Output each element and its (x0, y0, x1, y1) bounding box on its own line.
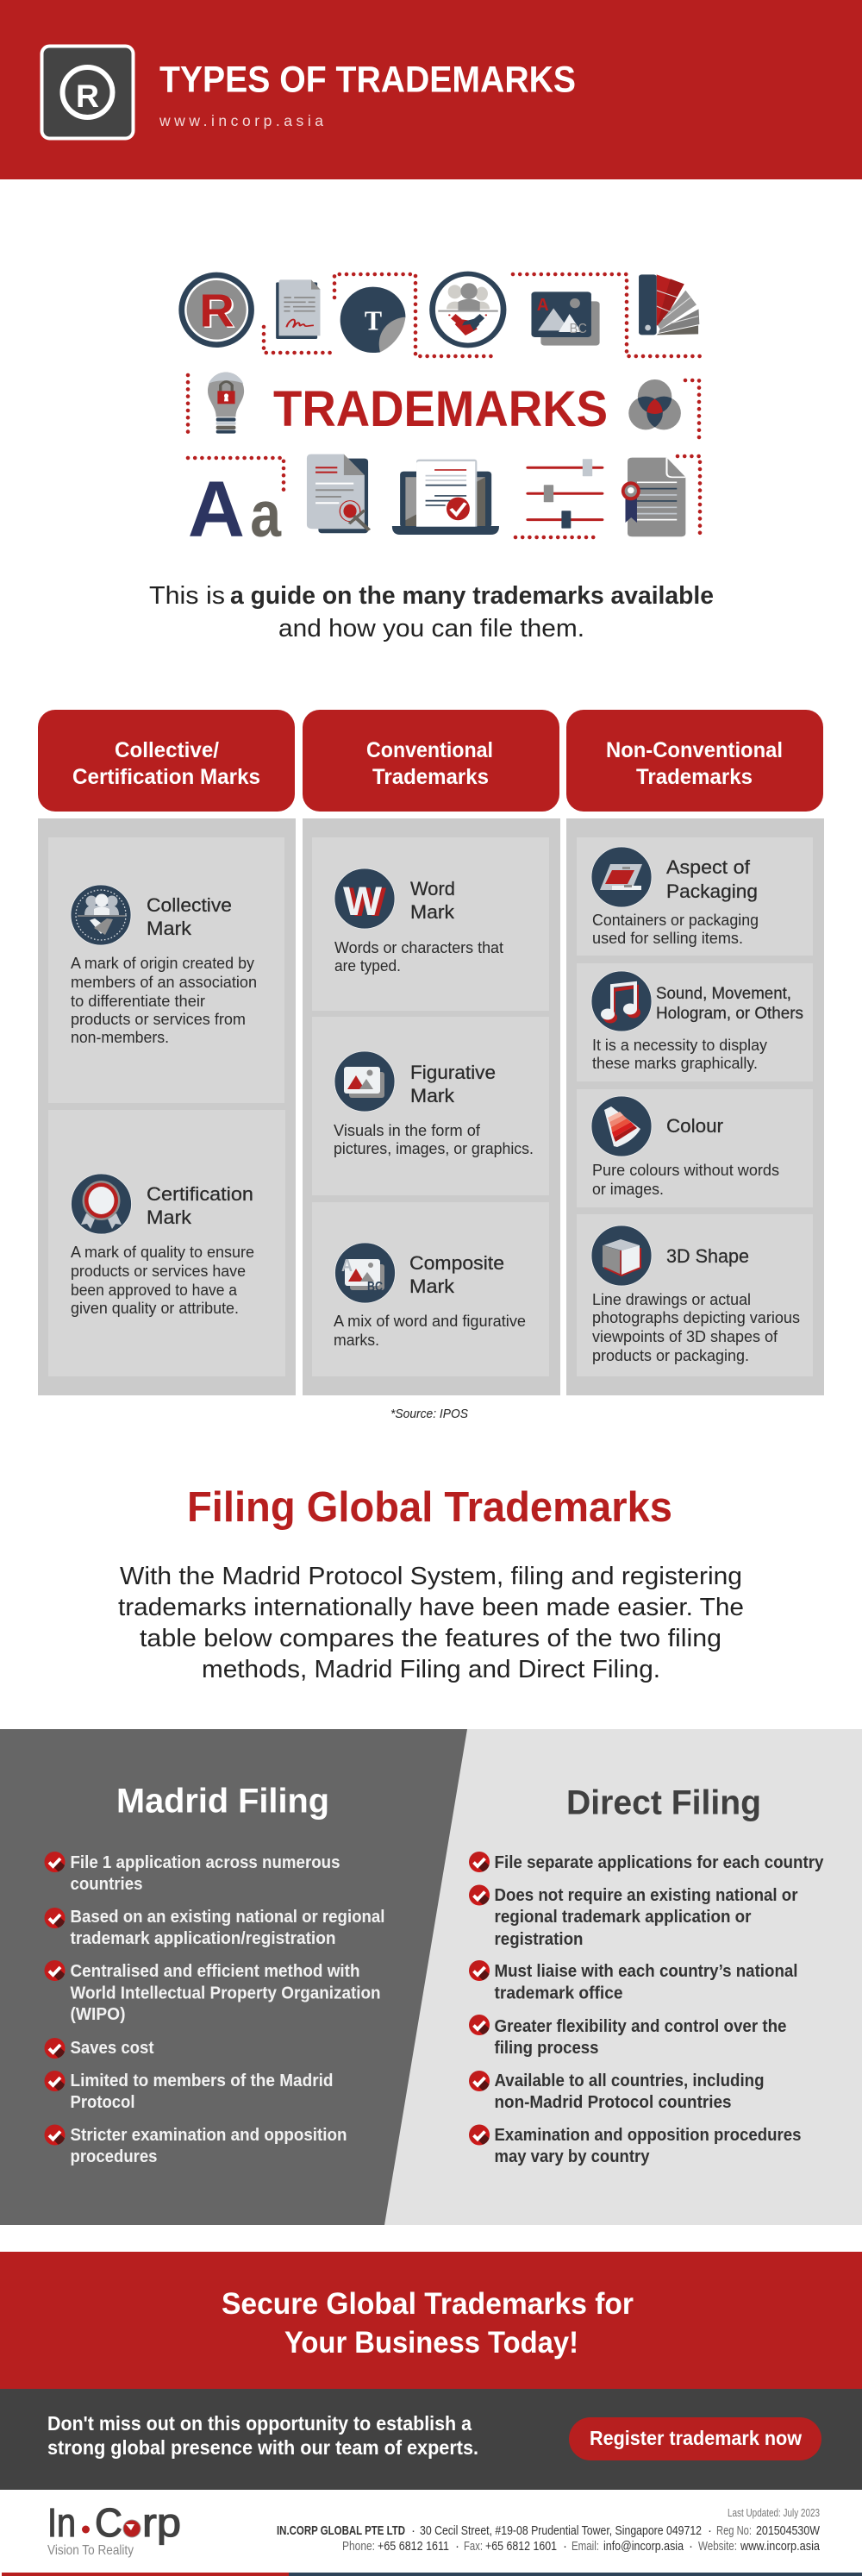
logo: In.Corp: rp (142, 2500, 181, 2545)
footer company details: · (708, 2523, 712, 2538)
source note: *Source: IPOS (390, 1407, 468, 1421)
check list: World Intellectual Property Organization (71, 1984, 381, 2003)
card title: Mark (410, 1085, 455, 1106)
icon: composite mark: BC (367, 1280, 383, 1294)
check list: trademark office (495, 1984, 622, 2003)
card description: Pure colours without words (592, 1162, 779, 1179)
title: TYPES OF TRADEMARKS (159, 60, 576, 100)
card description: pictures, images, or graphics. (334, 1140, 534, 1157)
icon: laptop with approved document (392, 460, 499, 535)
header band (0, 0, 862, 179)
footer company details: info@incorp.asia (603, 2539, 684, 2554)
icon: packaging (591, 847, 652, 907)
column: conventional trademarks (303, 710, 560, 1395)
card description: been approved to have a (71, 1282, 238, 1299)
panel: Direct filing (469, 1783, 824, 2166)
card: composite mark (312, 1202, 549, 1376)
column header: Trademarks (636, 765, 753, 789)
column header: Collective/ (115, 738, 219, 762)
check list: Protocol (71, 2093, 134, 2112)
footer company details: Phone: (342, 2539, 375, 2554)
card title: Collective (147, 894, 232, 916)
check list: Based on an existing national or regional (71, 1908, 384, 1927)
card description: A mark of quality to ensure (71, 1244, 254, 1261)
check list (469, 1852, 824, 2166)
check list: regional trademark application or (495, 1908, 752, 1927)
logo: In.Corp (47, 2500, 181, 2558)
card title: Mark (147, 1207, 192, 1228)
card title: Aspect of (666, 856, 751, 878)
icon: T sticker: T (365, 305, 382, 335)
panel: Madrid filing (45, 1782, 384, 2166)
card: 3D shape (577, 1214, 813, 1376)
intro text (149, 582, 714, 642)
check list: filing process (495, 2039, 598, 2058)
card: word mark (312, 837, 549, 1011)
comparison background (0, 1729, 862, 2225)
footer company details: +65 6812 1611 (378, 2539, 449, 2554)
footer company details: · (689, 2539, 693, 2554)
check list: Examination and opposition procedures (495, 2126, 802, 2145)
card description: to differentiate their (71, 993, 205, 1010)
check list: (WIPO) (71, 2005, 126, 2024)
card title: Certification (147, 1183, 253, 1205)
check list: File 1 application across numerous (71, 1853, 340, 1872)
icon: word mark: W (347, 879, 387, 924)
footer company details: IN.CORP GLOBAL PTE LTD (277, 2523, 405, 2538)
icon: signed document (276, 279, 321, 339)
icon: composite mark (334, 1243, 395, 1303)
card title (410, 1062, 496, 1106)
check list: non-Madrid Protocol countries (495, 2093, 731, 2112)
card title: Mark (409, 1275, 455, 1297)
footer company details: Last Updated: July 2023 (728, 2506, 820, 2519)
card description: A mix of word and figurative (334, 1313, 526, 1330)
card description: Words or characters that (334, 939, 503, 956)
panel heading: Madrid Filing (116, 1782, 329, 1820)
icon: word mark (334, 868, 395, 929)
check list (45, 1852, 384, 2166)
icon: word mark: W (343, 878, 383, 924)
card: aspect of packaging (577, 837, 813, 956)
card title (409, 1252, 504, 1297)
call to action banner (0, 2252, 862, 2389)
check list: countries (71, 1875, 143, 1894)
icon: music notes (591, 971, 652, 1031)
check list: Centralised and efficient method with (71, 1962, 360, 1981)
card title (147, 894, 232, 939)
card: collective mark (48, 837, 284, 1103)
card description (334, 939, 503, 975)
icon: registered R (178, 273, 254, 348)
check list: Available to all countries, including (495, 2071, 764, 2090)
card description: products or packaging. (592, 1347, 749, 1364)
check list: File separate applications for each country (495, 1853, 824, 1872)
card description: marks. (334, 1332, 379, 1349)
icon: collective handshake (429, 272, 506, 348)
card description: given quality or attribute. (71, 1300, 239, 1317)
column header: Conventional (366, 738, 493, 762)
icon: registered mark badge: R (76, 78, 99, 114)
icon: composite picture (531, 291, 600, 346)
card title: Sound, Movement, (656, 984, 791, 1003)
card description (592, 1162, 779, 1198)
filing intro text: With the Madrid Protocol System, filing and registering (120, 1563, 742, 1590)
card description: these marks graphically. (592, 1055, 758, 1072)
card description: or images. (592, 1181, 664, 1198)
card description: A mark of origin created by (71, 955, 254, 972)
card description: Containers or packaging (592, 912, 759, 929)
card: figurative mark (312, 1017, 549, 1195)
intro text: This is (149, 582, 225, 610)
check list: procedures (71, 2147, 157, 2166)
call to action strip (0, 2389, 862, 2490)
card title: Mark (410, 901, 455, 923)
card title: Mark (147, 918, 192, 939)
icon: composite mark: A (341, 1257, 353, 1275)
check list: Does not require an existing national or (495, 1886, 798, 1905)
card description: Line drawings or actual (592, 1291, 751, 1308)
card description: used for selling items. (592, 930, 743, 947)
footer company details: · (563, 2539, 567, 2554)
call to action banner: Secure Global Trademarks for (222, 2287, 634, 2321)
column header: Certification Marks (72, 765, 260, 789)
column header: Non-Conventional (606, 738, 783, 762)
footer company details: · (455, 2539, 459, 2554)
register button (569, 2417, 821, 2460)
register button: Register trademark now (590, 2427, 802, 2449)
card description: members of an association (71, 974, 257, 991)
card title (147, 1183, 253, 1228)
column header (38, 710, 295, 812)
card title: Word (410, 878, 455, 899)
icon: Aa typeface: A (188, 465, 245, 554)
column header: Trademarks (372, 765, 489, 789)
check list: may vary by country (495, 2147, 650, 2166)
card description (71, 955, 257, 1046)
hero illustration (178, 272, 701, 554)
logo: In.Corp: C (95, 2500, 122, 2545)
footer company details: · (411, 2523, 415, 2538)
footer company details: Email: (572, 2539, 599, 2554)
intro text: a guide on the many trademarks available (230, 582, 714, 610)
CTA text: strong global presence with our team of experts. (47, 2436, 478, 2459)
column header (303, 710, 559, 812)
icon: composite picture: A (537, 295, 549, 314)
check list: Stricter examination and opposition (71, 2126, 347, 2145)
icon: registered R: R (199, 285, 234, 337)
check list: trademark application/registration (71, 1929, 336, 1948)
card: certification mark (48, 1110, 285, 1376)
icon: cube (591, 1225, 652, 1286)
icon: registered mark badge (41, 47, 133, 138)
card title: Hologram, or Others (656, 1004, 803, 1023)
card description (592, 912, 759, 947)
dotted connector lines (188, 274, 701, 538)
icon: venn diagram (628, 379, 681, 429)
card title (656, 984, 803, 1023)
check list: Limited to members of the Madrid (71, 2071, 333, 2090)
panel heading: Direct Filing (566, 1783, 761, 1821)
card title: 3D Shape (666, 1245, 749, 1267)
icon: registered R: R (201, 286, 236, 338)
hero word: TRADEMARKS (273, 381, 608, 437)
column: non-conventional trademarks (566, 710, 824, 1395)
card description: viewpoints of 3D shapes of (592, 1328, 778, 1345)
icon: Aa typeface: a (250, 479, 282, 551)
icon: stamped document (307, 454, 369, 533)
icon: certified document (622, 458, 685, 536)
footer company details (277, 2506, 821, 2554)
footer company details: Website: (698, 2539, 737, 2554)
card description: products or services from (71, 1011, 246, 1028)
heading: filing global trademarks: Filing Global Trademarks (187, 1484, 672, 1531)
card: sound, movement, hologram (577, 963, 813, 1081)
logo: In.Corp: In (47, 2500, 76, 2545)
check list: Saves cost (71, 2039, 154, 2058)
filing intro text (118, 1563, 744, 1683)
filing intro text: table below compares the features of the two filing (140, 1625, 721, 1652)
card title: Composite (409, 1252, 504, 1274)
card description: Visuals in the form of (334, 1122, 481, 1139)
bottom colour bar (2, 2573, 862, 2576)
icon: colour fan (639, 274, 699, 335)
icon: certification mark (71, 1174, 131, 1234)
card title: Figurative (410, 1062, 496, 1083)
column header (566, 710, 823, 812)
card description (592, 1291, 800, 1364)
icon: collective mark (71, 885, 131, 945)
call to action banner: Your Business Today! (284, 2326, 578, 2360)
card description: photographs depicting various (592, 1309, 800, 1326)
check list: registration (495, 1930, 583, 1949)
card description: It is a necessity to display (592, 1037, 767, 1054)
CTA text (47, 2412, 478, 2459)
column: collective and certification marks (38, 710, 296, 1395)
filing intro text: trademarks internationally have been made easier. The (118, 1594, 744, 1621)
icon: T sticker (340, 287, 405, 353)
CTA text: Don't miss out on this opportunity to establish a (47, 2412, 472, 2435)
card description: products or services have (71, 1263, 246, 1280)
icon: composite picture: BC (570, 321, 587, 336)
footer company details: 30 Cecil Street, #19-08 Prudential Tower, Singapore 049712 (420, 2523, 702, 2538)
card: colour (577, 1089, 813, 1207)
card description (592, 1037, 767, 1072)
check list: Must liaise with each country’s national (495, 1962, 798, 1981)
icon: figurative mark (334, 1051, 395, 1112)
card description: are typed. (334, 957, 401, 975)
card description: non-members. (71, 1029, 169, 1046)
card title: Packaging (666, 881, 758, 902)
footer company details: 201504530W (756, 2523, 821, 2538)
footer company details: Fax: (464, 2539, 483, 2554)
website: www.incorp.asia (159, 112, 323, 129)
card description (71, 1244, 254, 1317)
icon: IP bulb with lock (208, 373, 244, 434)
icon: colour swatches (591, 1096, 652, 1156)
card description (334, 1313, 526, 1349)
footer company details: Reg No: (716, 2523, 752, 2538)
filing intro text: methods, Madrid Filing and Direct Filing. (202, 1656, 660, 1683)
footer company details: +65 6812 1601 (485, 2539, 557, 2554)
card title: Colour (666, 1115, 723, 1137)
check list: Greater flexibility and control over the (495, 2017, 786, 2036)
logo: In.Corp: Vision To Reality (47, 2543, 134, 2558)
card title (410, 878, 455, 923)
card title (666, 856, 758, 902)
intro text: and how you can file them. (278, 615, 584, 642)
card description (334, 1122, 534, 1157)
footer company details: www.incorp.asia (740, 2539, 821, 2554)
icon: sliders (528, 459, 603, 529)
